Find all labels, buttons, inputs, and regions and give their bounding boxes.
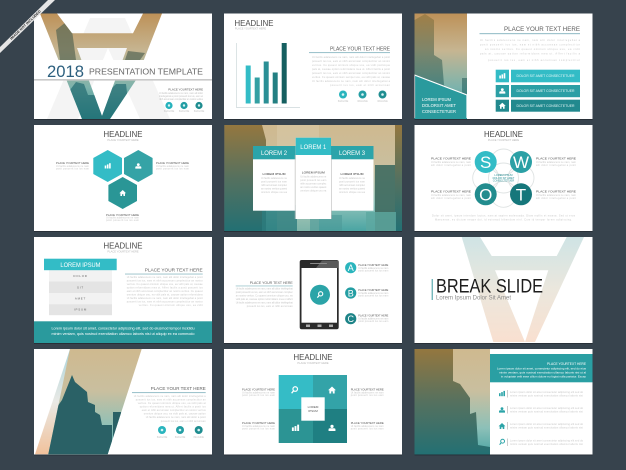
search badge: [310, 285, 330, 305]
card: Lorem 2: LOREM 2: [261, 151, 288, 157]
label T: Ut facilis adalescens ne nam, nam: [536, 194, 576, 197]
button 1: DOLOR SIT AMET CONSECTETUER: [516, 74, 575, 78]
text heading: [125, 268, 203, 275]
cover icon row: [164, 102, 205, 113]
slide 1: cover: [34, 14, 212, 119]
circle W: [510, 151, 532, 173]
card: Lorem 2: LOREM IPSUM: [262, 172, 286, 176]
body text: posuerit ius ius, eam et nibh accumsan complectitur an: [136, 398, 206, 402]
body text: veritus. Cu quaest omnium ubique usu, ea vidit: [139, 304, 203, 307]
circle W: W: [513, 153, 529, 172]
button 2: DOLOR SIT AMET CONSECTETUER: [516, 89, 575, 93]
card: Lorem 1: LOREM 1: [300, 145, 327, 151]
body text: posuerit ius ius, eam et nibh accumsan complectitur: [488, 59, 580, 62]
table: [49, 270, 112, 315]
label S: [431, 156, 471, 167]
body text: option reformidans mea ut. Affert facilis a posit ius: [140, 406, 206, 408]
card: Lorem 1: [295, 138, 332, 219]
headline: PLACE YOURTEXT HERE: [107, 250, 139, 254]
text heading: [480, 26, 580, 34]
label top right: PLACE YOURTEXT HERE: [351, 388, 384, 392]
item C: C: [347, 314, 354, 324]
text heading: PLACE YOUR TEXT HERE: [504, 26, 580, 33]
footer text: Dolor sit amet, ipsum interdum luctus, nam at sapien malesuada. Diam mollis et massa. Sed ut eros: [432, 214, 576, 218]
teal header: [490, 354, 592, 382]
body text: veritus. Cu quaest omnium semper usu, ea vidit pals at, causae: [312, 76, 391, 79]
body text: vidit pals at, causae option reformidans mea ut affert: [236, 298, 293, 301]
body text: posuerit ius ius, eam et nibh accumsan complectitur an nostro: [312, 60, 391, 63]
circle O: [475, 183, 497, 205]
body text: Ut facilis adalescens ne nam, nam alii dolor intellegebat a posit: [312, 56, 390, 59]
slide 3: photo and buttons: [414, 14, 592, 119]
icon row: IMAGINE: [175, 436, 186, 439]
button 1: [496, 70, 580, 82]
headline: HEADLINE: [104, 240, 143, 250]
label bottom right: [351, 421, 384, 430]
cover icon row: IMAGINE: [164, 110, 175, 113]
body text: posuerit ius ius, eam et nibh accumsan: [330, 84, 391, 87]
label left: PLACE YOURTEXT HERE: [56, 161, 89, 165]
headline: HEADLINE: [484, 129, 523, 139]
table: IPSUM: [74, 308, 87, 312]
item B: B: [348, 288, 354, 298]
cover text block: [159, 88, 204, 101]
cover text block: Ut facilis adalescens ne nam, nam alii dolor: [159, 92, 203, 95]
label bottom left: posit posuerit ius ius eam: [242, 428, 275, 430]
label S: PLACE YOURTEXT HERE: [431, 156, 471, 160]
body text: eam et nibh accumsan complectitur an nostro veritus: [142, 409, 206, 412]
label right: Ut facilis adalescens ne nam: [156, 165, 189, 168]
body text: posuerit ius ius, eam et nibh accumsan complectitur an nostro: [127, 300, 203, 304]
body text: Ut facilis adalescens ne nam, nam alii dolor intellegebat a: [312, 80, 391, 83]
photo caption: [422, 97, 456, 114]
pale chevron: [462, 237, 584, 342]
cover title: 2018: [47, 62, 84, 81]
body text: Ut facilis adalescens ne nam, nam alii dolor intellegebat a: [480, 39, 581, 42]
quadrant top left: [279, 375, 313, 409]
label right: PLACE YOURTEXT HERE: [156, 161, 189, 165]
pastel stripes: [35, 349, 80, 454]
label bottom: PLACE YOURTEXT HERE: [106, 213, 139, 217]
photo caption: LOREM IPSUM: [422, 97, 451, 102]
center label: CONSECTETUER: [493, 179, 514, 183]
card: Lorem 2: posit posuerit ius eam: [261, 180, 287, 184]
item A: Ut facilis adalescens ne nam: [358, 267, 388, 270]
footer text: [432, 214, 576, 222]
label top right: Ut facilis adalescens ne nam: [351, 392, 384, 394]
headline: PLACE YOURTEXT HERE: [488, 138, 519, 142]
city photo: [224, 125, 402, 231]
cover text block: nibh accumsan complectitur an nostro veritus: [159, 98, 204, 101]
teal header: Lorem ipsum dolor sit amet, consectetur adipiscing elit, sed do eius: [497, 366, 587, 370]
item B: PLACE YOURTEXT HERE: [358, 288, 388, 292]
item C: Ut facilis adalescens ne nam: [358, 318, 388, 320]
corner ribbon: [0, 0, 55, 53]
card: Lorem 3: posit posuerit ius eam: [339, 180, 365, 184]
card: Lorem 3: LOREM 3: [339, 151, 366, 157]
city photo: [414, 349, 490, 454]
body text: an nostro veritus. Cu quaest omnium ubique usu, ea vidit: [485, 48, 580, 51]
label O: PLACE YOURTEXT HERE: [431, 190, 471, 194]
center label: DOLOR SIT AMET: [493, 176, 515, 180]
text heading: [132, 386, 206, 393]
headline: PLACE YOURTEXT HERE: [297, 361, 329, 365]
body text: posuerit ius ius, eam et nibh accumsan: [161, 420, 206, 423]
phone: [300, 260, 339, 329]
list item 1: Lorem ipsum dolor sit amet consectetur adipiscing elit sed do: [510, 391, 584, 394]
label W: [536, 156, 576, 167]
body text: pals at, causae option reformidans mea ut. Affert facilis a posit: [312, 68, 390, 71]
text heading: [236, 281, 293, 286]
body text: [134, 395, 206, 423]
card: Lorem 2: omnium ubique usu ea: [261, 191, 288, 194]
teal header: PLACE YOURTEXT HERE: [547, 362, 586, 366]
table: SIT: [77, 286, 84, 290]
slide 8: phone: [224, 237, 402, 343]
label top left: Ut facilis adalescens ne nam: [242, 392, 275, 394]
card: Lorem 2: an nostro veritus quaest: [261, 188, 287, 190]
list item 3: Lorem ipsum dolor sit amet consectetur adipiscing elit sed do: [510, 423, 584, 426]
item A: A: [348, 263, 354, 273]
item A: PLACE YOURTEXT HERE: [358, 263, 388, 267]
quadrant bottom right: [313, 409, 347, 443]
circle S: [475, 151, 497, 173]
label left: Ut facilis adalescens ne nam: [56, 165, 89, 168]
bar chart: [236, 43, 300, 108]
button 2: [496, 85, 580, 97]
label left: [56, 161, 89, 170]
center box: LOREM: [308, 405, 319, 409]
headline: HEADLINE: [234, 19, 274, 28]
body text: pals at, causae option reformidans mea ut. Affert facilis a: [480, 52, 581, 56]
cover text block: intellegebat a posit posuerit ius ius, eam et: [159, 95, 203, 98]
slide 11: quadrant square: [224, 349, 402, 454]
label bottom left: Ut facilis adalescens ne nam: [242, 425, 275, 428]
body text: posit posuerit ius ius, eam et nibh accumsan complectitur: [480, 44, 580, 46]
headline: HEADLINE: [104, 129, 143, 139]
slide 7: table and footer: [34, 237, 212, 343]
SWOT rings: [473, 149, 534, 207]
body text: posuerit ius ius, eam et nibh accumsan: [247, 305, 293, 308]
slide 4: hexagons: [34, 125, 212, 231]
slide 6: SWOT: [414, 125, 592, 231]
headline: PLACE YOURTEXT HERE: [235, 26, 266, 30]
label right: [156, 161, 189, 170]
label top left: [242, 388, 275, 397]
teal footer: [34, 321, 212, 343]
item C: PLACE YOURTEXT HERE: [358, 314, 388, 318]
card: Lorem 1: nibh accumsan complec: [300, 182, 327, 186]
circle T: [510, 183, 532, 205]
label top right: [351, 388, 384, 397]
body text: veritus. Cu quaest omnium ubique usu, ea vidit patrioque: [312, 64, 391, 67]
faint background letter A: [47, 18, 170, 119]
label right: posit posuerit ius ius eam: [156, 168, 189, 170]
slide 10: slanted photo: [34, 349, 212, 454]
card: Lorem 1: LOREM IPSUM: [302, 170, 325, 174]
label O: Ut facilis adalescens ne nam, nam: [431, 194, 471, 197]
icon row: IMAGINE: [193, 436, 204, 439]
list item 4: minim veniam quis nostrud exercitation ullamco laboris nisi: [510, 443, 583, 446]
slide 12: photo and list: [414, 349, 592, 454]
cover title: PRESENTATION TEMPLATE: [89, 66, 203, 76]
icon row: [338, 90, 388, 103]
body text: Ut facilis adalescens ne nam, nam alii dolor intellegebat a posit: [127, 276, 203, 279]
icon row: IMAGINE: [377, 100, 388, 103]
headline: HEADLINE: [294, 352, 333, 362]
icon row: IMAGINE: [338, 100, 349, 103]
item B: posit posuerit ius ius eam: [358, 294, 388, 298]
accent bar: [432, 279, 433, 300]
body text: Ut facilis adalescens ne nam, nam alii dolor intellegebat: [236, 288, 293, 290]
center label: [493, 173, 515, 183]
slide 9: break slide: [414, 237, 592, 343]
label top left: PLACE YOURTEXT HERE: [242, 388, 275, 392]
list item 3: minim veniam quis nostrud exercitation ullamco laboris nisi: [510, 426, 583, 430]
list item 1: minim veniam quis nostrud exercitation ullamco laboris nisi: [510, 394, 583, 398]
list item 2: Lorem ipsum dolor sit amet consectetur adipiscing elit sed do: [510, 407, 584, 410]
body text: Ut facilis adalescens ne nam, nam alii dolor intellegebat: [236, 302, 293, 304]
body text: posuerit ius ius, eam et nibh accumsan complectitur an nostro: [312, 72, 391, 75]
table: AMET: [75, 296, 86, 300]
card: Lorem 3: LOREM IPSUM: [340, 172, 364, 176]
item C: posit posuerit ius ius eam: [358, 320, 388, 323]
body text: [236, 288, 293, 308]
card: Lorem 3: [331, 146, 374, 211]
label O: alii dolor intellegebat a posit: [431, 197, 471, 200]
icon row: IMAGINE: [157, 436, 168, 439]
card: Lorem 1: Ut facilis adalescens ne: [300, 176, 327, 178]
item A: posit posuerit ius ius eam: [358, 270, 388, 272]
label bottom right: PLACE YOURTEXT HERE: [351, 421, 384, 425]
body text: posuerit ius ius, eam et nibh accumsan complectitur an nostro: [127, 280, 203, 282]
label bottom right: posit posuerit ius ius eam: [351, 428, 384, 430]
icon row: [157, 426, 204, 439]
label W: Ut facilis adalescens ne nam, nam: [536, 161, 576, 164]
card: Lorem 1: posit posuerit ius eam: [300, 179, 326, 182]
list item 1: [499, 390, 584, 398]
table header: LOREM IPSUM: [60, 262, 100, 269]
button 3: [496, 100, 580, 112]
body text: posit posuerit ius ius, eam et nibh accumsan complec: [236, 291, 293, 294]
body text: omnium ubique usu, ea vidit pals at, causae option: [144, 412, 206, 416]
teal footer: minim veniam, quis nostrud exercitation ullamco laboris nisi ut aliquip ex ea commodo: [52, 332, 195, 336]
body text: [127, 276, 203, 307]
body text: [312, 56, 391, 87]
text heading: PLACE YOUR TEXT HERE: [145, 268, 203, 274]
headline: PLACE YOURTEXT HERE: [107, 138, 139, 142]
hexagon 2: [124, 150, 153, 182]
text heading: PLACE YOUR TEXT HERE: [250, 281, 293, 285]
quadrant bottom left: [279, 409, 313, 443]
list item 2: [499, 406, 584, 414]
body text: an nostro veritus. Cu quaest omnium ubique usu, ea: [236, 294, 293, 298]
hexagon 1: [93, 150, 122, 182]
center box: [301, 397, 325, 421]
hexagon 3: [108, 177, 137, 209]
label top right: posit posuerit ius ius eam: [351, 394, 384, 397]
teal header: in voluptate velit esse cillum dolore eu fugiat nulla pariatur. Excep: [501, 374, 586, 378]
cover text block: PLACE YOURTEXT HERE: [168, 88, 203, 92]
label T: [536, 190, 576, 200]
card: Lorem 2: nibh accumsan complec: [261, 184, 288, 187]
label bottom: [106, 213, 139, 222]
label W: PLACE YOURTEXT HERE: [536, 156, 576, 160]
body text: Ut facilis adalescens ne nam, nam alii dolor intellegebat a posit: [127, 297, 203, 300]
teal footer: Lorem ipsum dolor sit amet, consectetur adipiscing elit, sed do eiusmod tempor incididu: [52, 326, 195, 330]
label T: PLACE YOURTEXT HERE: [536, 190, 576, 194]
label left: posit posuerit ius ius eam: [56, 168, 89, 170]
label S: Ut facilis adalescens ne nam, nam: [431, 161, 471, 164]
photo panel: [414, 14, 467, 119]
label bottom left: [242, 421, 275, 430]
card: Lorem 1: omnium ubique usu ea: [300, 190, 327, 192]
center box: IPSUM: [308, 409, 318, 413]
body text: option reformidans mea ut. Affert facilis a posit posuerit ius: [127, 286, 203, 290]
break slide subtitle: Lorem Ipsum Dolor Sit Amet: [436, 295, 511, 301]
label O: [431, 190, 471, 200]
slide 2: bar chart: [224, 14, 402, 119]
label bottom right: Ut facilis adalescens ne nam: [351, 425, 384, 428]
card: Lorem 2: [253, 146, 296, 211]
list item 4: Lorem ipsum dolor sit amet consectetur adipiscing elit sed do: [510, 440, 584, 442]
cover icon row: IMAGINE: [179, 110, 190, 113]
label bottom: posit posuerit ius ius eam: [106, 219, 139, 222]
item B: Ut facilis adalescens ne nam: [358, 292, 388, 295]
list item 2: minim veniam quis nostrud exercitation ullamco laboris nisi: [510, 410, 583, 414]
icon row: IMAGINE: [357, 100, 368, 103]
label W: alii dolor intellegebat a posit: [536, 164, 576, 167]
photo caption: CONSECTETUER: [422, 109, 456, 114]
label bottom left: PLACE YOURTEXT HERE: [242, 421, 275, 425]
item C: [345, 313, 388, 324]
label top left: posit posuerit ius ius eam: [242, 394, 275, 397]
card: Lorem 3: Ut facilis adalescens ne: [339, 177, 366, 180]
corner ribbon: IMAGE NOT INCLUDED: [9, 9, 42, 41]
item A: [345, 262, 388, 273]
quadrant top right: [313, 375, 347, 409]
text heading: PLACE YOUR TEXT HERE: [151, 386, 206, 391]
list item 3: [499, 422, 584, 430]
cover title: [47, 62, 203, 81]
circle O: O: [479, 186, 492, 204]
card: Lorem 3: omnium ubique usu ea: [339, 191, 366, 194]
cover icon row: IMAGINE: [194, 110, 205, 113]
card: Lorem 2: Ut facilis adalescens ne: [261, 177, 288, 180]
body text: veritus. Cu quaest omnium ubique usu, ea vidit pals at, causae: [127, 283, 203, 286]
slanted photo: [48, 349, 142, 454]
label S: alii dolor intellegebat a posit: [431, 164, 471, 167]
center label: LOREM IPSUM: [494, 173, 513, 177]
label bottom: Ut facilis adalescens ne nam: [106, 217, 139, 220]
slide 5: three cards on photo: [224, 125, 402, 231]
footer text: Maecenas, eu dictum neque dui, id euismod bibendum nisl. Cum id tempor lorem adipiscing.: [435, 218, 572, 222]
body text: [480, 39, 581, 62]
body text: Ut facilis adalescens ne nam, nam alii dolor intellegebat a: [134, 395, 206, 398]
circle S: S: [480, 153, 491, 172]
table header: [44, 259, 117, 270]
card: Lorem 3: nibh accumsan complec: [339, 184, 366, 187]
body text: Ut facilis adalescens ne nam, nam alii dolor a posit: [146, 416, 206, 419]
table: DOLOR: [73, 274, 88, 278]
card: Lorem 3: an nostro veritus quaest: [339, 188, 365, 190]
break slide title: BREAK SLIDE: [436, 277, 543, 298]
photo chevron shape: [40, 14, 162, 119]
body text: omnium ubique usu, ea vidit pals at, causae option reformidans: [127, 294, 203, 296]
card: Lorem 1: an nostro veritus quaest: [300, 186, 327, 189]
teal header: minim veniam, quis nostrud exercitation ullamco laboris nisi ut al: [499, 370, 586, 374]
item B: [345, 287, 388, 299]
button 3: DOLOR SIT AMET CONSECTETUER: [516, 104, 575, 108]
circle T: T: [516, 186, 526, 204]
list item 4: [500, 438, 584, 446]
text heading: [309, 46, 391, 53]
teal corner with caption: [414, 75, 467, 119]
body text: eam et nibh accumsan complectitur an nostro veritus. Cu quaest: [127, 290, 203, 293]
label T: alii dolor intellegebat a posit: [536, 197, 576, 200]
text heading: PLACE YOUR TEXT HERE: [330, 46, 391, 52]
photo caption: DOLORSIT AMET: [422, 103, 456, 108]
body text: veritus. Cu quaest omnium ubique usu, ea vidit pals at: [138, 402, 206, 405]
